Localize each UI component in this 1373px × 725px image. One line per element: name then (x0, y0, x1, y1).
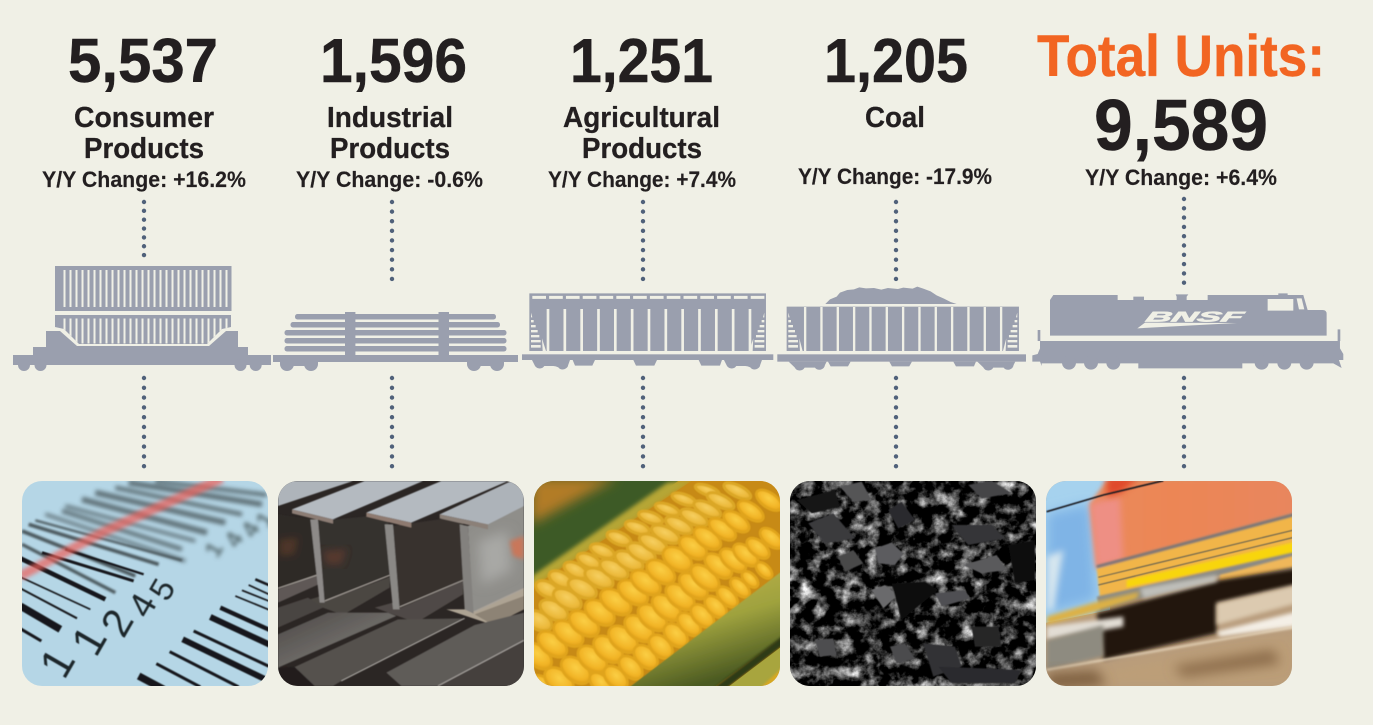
ear of corn (532, 479, 782, 688)
coal heap (825, 287, 957, 304)
orange car side (1090, 477, 1297, 568)
vertical webs (310, 519, 325, 603)
photo: coal (790, 481, 1036, 686)
husk (629, 573, 782, 688)
husk background (532, 479, 681, 581)
yellow stripes (1097, 515, 1297, 598)
number: 1,251: 1,251 (570, 27, 713, 96)
icon: coal car (777, 287, 1026, 370)
y/y change: +16.2%: Y/Y Change: +16.2% (42, 167, 246, 192)
dotted connectors: headings to trains (144, 199, 1184, 284)
sharp bars (20, 549, 270, 689)
far blurred bars (45, 481, 267, 561)
number: 1,205: 1,205 (824, 27, 968, 96)
label: Agricultural Products: Agricultural (563, 102, 720, 134)
number: 5,537: 5,537 (68, 27, 218, 96)
label: Consumer Products (74, 102, 214, 165)
blurred far digits: 1 (199, 537, 228, 561)
blurred far digits: 1 (250, 507, 279, 531)
barcode digits: 2 (91, 601, 143, 644)
photo: motion-blurred locomotive (1043, 477, 1297, 690)
column heading: total units (1037, 24, 1325, 190)
icon: intermodal container car (13, 266, 271, 371)
barcode digits: 1 (30, 640, 85, 686)
icon: flat car with steel bundle (273, 312, 518, 371)
photo: barcode (20, 478, 279, 689)
label: Coal: Coal (865, 102, 925, 134)
lower flanges (278, 575, 319, 603)
y/y change: +7.4%: Y/Y Change: +7.4% (548, 167, 736, 192)
column heading: coal (798, 27, 992, 189)
blurred far digits (204, 512, 268, 560)
y/y change: +6.4%: Y/Y Change: +6.4% (1085, 165, 1277, 190)
y/y change: -0.6%: Y/Y Change: -0.6% (296, 167, 483, 192)
column heading: industrial products (296, 27, 483, 192)
photo: corn (518, 478, 786, 705)
barcode digits: 1 (62, 618, 117, 664)
shadowed web panels (278, 514, 317, 589)
y/y change: -17.9%: Y/Y Change: -17.9% (798, 164, 992, 189)
title: Total Units: Total Units: (1037, 24, 1325, 89)
dark undercarriage (1097, 568, 1297, 660)
blurred far digits: 4 (236, 517, 265, 541)
label: Industrial Products (327, 102, 453, 165)
icon: covered hopper car (522, 293, 773, 369)
upper kernels (523, 479, 753, 635)
label: Industrial Products: Products (330, 133, 450, 165)
sky and cab (1043, 477, 1110, 623)
number: 9,589: 9,589 (1094, 86, 1268, 166)
label: Consumer Products: Products (84, 133, 204, 165)
photo: steel beams (278, 481, 524, 686)
barcode digits: 4 (119, 586, 165, 624)
label: Agricultural Products: Products (582, 133, 702, 165)
central kernels (534, 488, 780, 686)
floor plates (278, 598, 323, 628)
top flanges (278, 481, 353, 506)
right beam face (468, 506, 524, 613)
column heading: agricultural products (548, 27, 736, 192)
mid blurred bars (22, 520, 182, 593)
icon: BNSF locomotive (1025, 293, 1343, 370)
label: Agricultural Products (563, 102, 720, 165)
BNSF logo (1137, 310, 1248, 328)
barcode digits (42, 578, 174, 678)
dotted connectors: trains to photos (144, 378, 1184, 468)
label: Consumer Products: Consumer (74, 102, 214, 134)
BNSF logo: BNSF (1144, 310, 1248, 325)
number: 1,596: 1,596 (320, 27, 467, 96)
column heading: consumer products (42, 27, 246, 192)
barcode digits: 5 (141, 572, 182, 606)
label: Industrial Products: Industrial (327, 102, 453, 134)
red scanner beam (20, 478, 222, 576)
blurred far digits: 4 (219, 527, 248, 551)
